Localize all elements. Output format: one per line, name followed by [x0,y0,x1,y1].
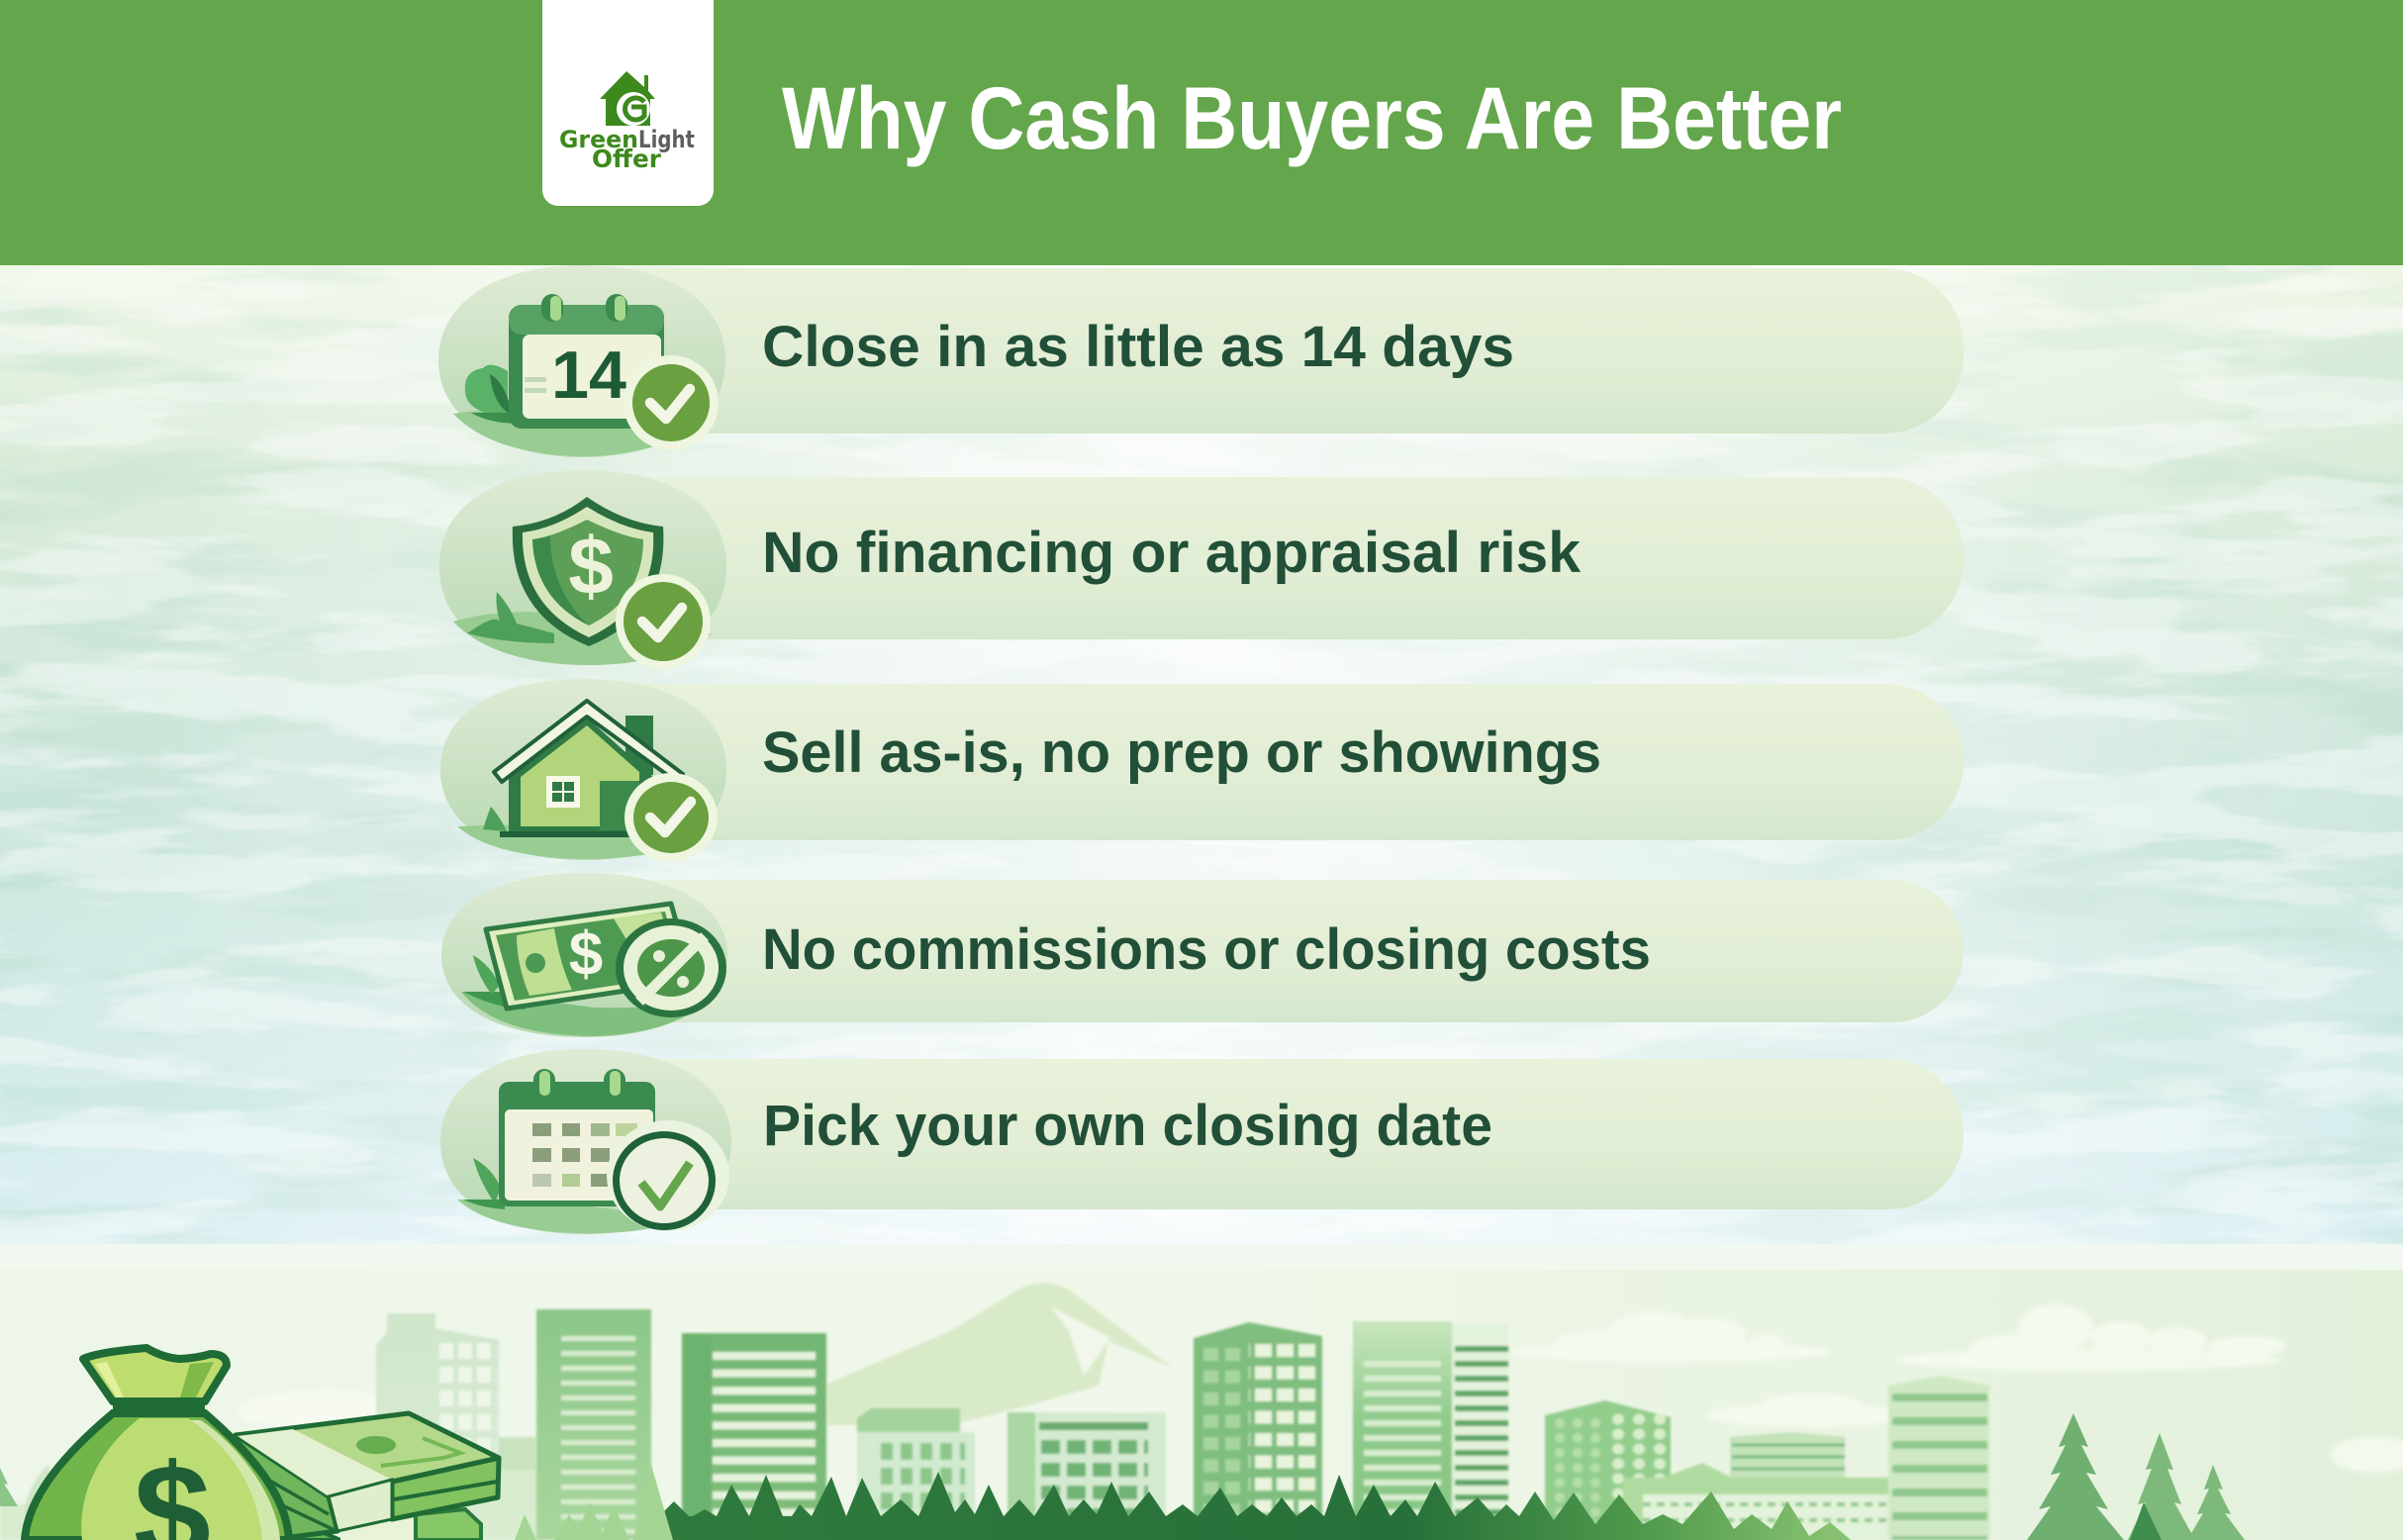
icon: calendar 14 with check: 14 [551,337,626,413]
pill 2 [515,477,1964,639]
icon: dollar shield with check: $ [568,522,614,612]
icon: calendar grid with check [440,1049,731,1234]
bottom scene background [0,1244,2403,1540]
icon: cash with no-percent badge [441,873,727,1037]
skyline: left faded buildings [0,1313,544,1540]
skyline: mid-rise buildings [857,1408,1166,1540]
skyline: right buildings [1545,1376,1989,1540]
light trees in front of left towers [515,1465,673,1540]
pill 4 [515,880,1964,1022]
label 1: Close in as little as 14 days [762,315,1514,379]
header bar [0,0,2403,265]
skyline: striped towers [536,1309,826,1540]
logo: wordmark: Green [559,126,638,153]
logo: wordmark: Offer [592,144,662,173]
background: watercolor sky [0,265,2403,1245]
clouds [238,1304,2403,1473]
skyline: mountain [827,1283,1173,1425]
icon: money bag [25,1348,289,1540]
row 2: no financing risk [439,470,1964,669]
icon: house with check [440,679,726,862]
label 4: No commissions or closing costs [762,917,1651,982]
row 3: sell as-is [440,679,1964,862]
row 4: no commissions [441,873,1964,1037]
logo: house mark [600,71,655,126]
row 5: pick closing date [440,1049,1964,1234]
pill 5 [515,1059,1964,1209]
skyline: window towers [1194,1321,1508,1540]
icon: calendar 14 with check [438,265,725,457]
pill 1 [515,268,1964,433]
title: Why Cash Buyers Are Better [782,68,1842,167]
small tree far left [0,1468,18,1506]
logo: wordmark [559,126,695,173]
row 1: close in 14 days [438,265,1964,457]
icon: dollar shield with check [439,470,726,669]
icon: cash with no-percent badge: $ [569,920,603,989]
bill top face [236,1413,499,1496]
label 5: Pick your own closing date [763,1094,1492,1158]
pill 3 [515,684,1964,840]
icon: money stack [236,1413,499,1540]
stack side faces [236,1435,337,1540]
paper band [238,1429,392,1496]
fir trees right [2027,1413,2245,1540]
lower stack [287,1509,481,1540]
label 3: Sell as-is, no prep or showings [762,721,1601,785]
logo: wordmark: Light [638,126,695,153]
tree line [633,1472,1851,1540]
label 2: No financing or appraisal risk [762,521,1582,585]
logo card [542,0,714,206]
